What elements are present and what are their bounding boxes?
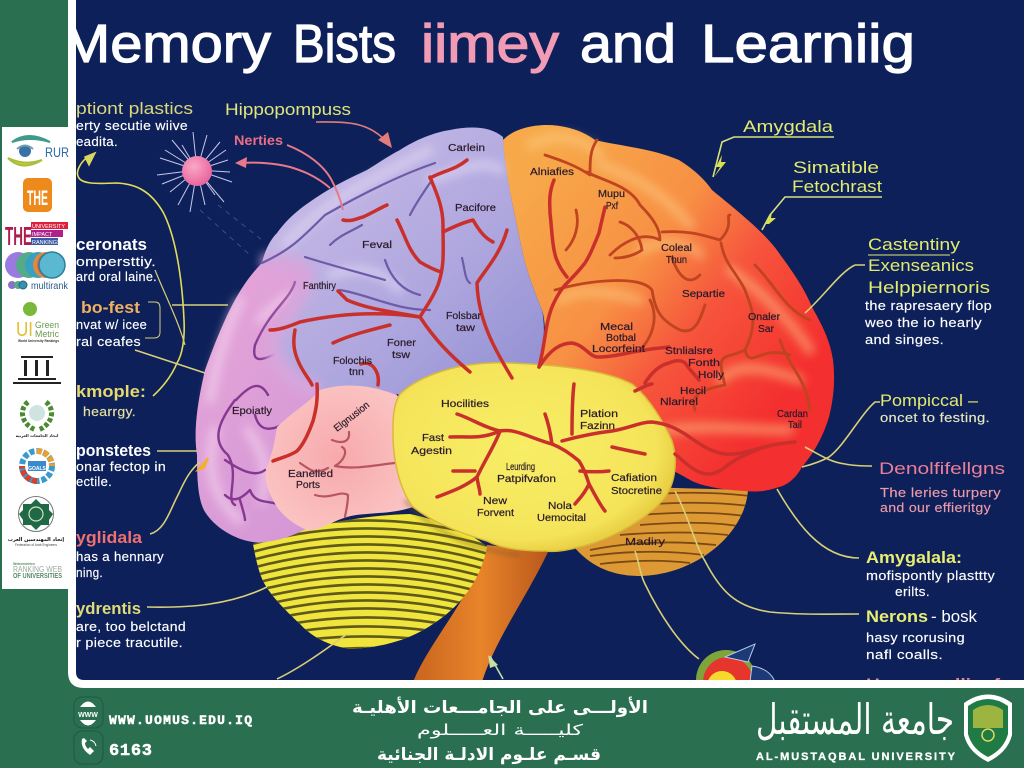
right callouts: Pompiccal – [880,391,979,410]
right callouts [743,117,1005,694]
logo: RUR: RUR [45,144,69,160]
arrow: hippocampus [316,122,390,146]
footer: Arabic institution text: كليـــــة العـــــلوم [417,721,584,739]
left callouts: hearrgy. [83,404,136,419]
right callouts: the rapresaery flop [865,298,992,313]
brain stem [413,545,548,682]
right callouts: Fetochrast [792,177,882,196]
brain region labels: Alniafies [530,167,574,178]
orange callout dot left [198,458,208,470]
logo: Federation of Arab Engineers [8,496,64,547]
logo: Federation of Arab Engineers: Federation of Arab Engineers [15,543,57,547]
left callouts: ponstetes [76,441,151,460]
logo: Federation of Arab Engineers: إتحاد المهندسين العرب [8,537,64,543]
footer: Arabic institution text [352,697,648,765]
logo: multirank [5,252,69,292]
brain region labels: Cafiation [611,473,657,484]
footer: university logo [756,694,1012,763]
brain region labels: Locorfeint [592,344,645,355]
brain region labels: Pxf [606,201,618,212]
brain region labels: Holly [698,370,724,381]
logo: UI GreenMetric: Green [35,320,59,330]
logo: Ranking Web of Universities: OF UNIVERSITIES [13,571,62,580]
icon: www globe: WWW [78,712,98,719]
brain region labels: Thun [666,255,687,266]
website address: WWW.UOMUS.EDU.IQ [109,713,252,728]
title: iimey [421,14,559,74]
neuron illustration [157,132,262,255]
brain region labels: Plation [580,409,618,420]
brain region labels: Stnlialsre [665,346,713,357]
right callouts: weo the io hearly [864,315,982,330]
icon: university shield [964,694,1012,762]
logo: UI GreenMetric [16,302,60,343]
logo: Arab universities wreath [16,402,59,438]
arrowhead: nerties [235,157,247,168]
left cerebellum and stem edge shadow [405,500,520,555]
label: nerties: Nerties [234,132,283,148]
left callouts: erty secutie wiive [76,118,188,133]
lightning mark: amygdala [714,155,726,177]
icon: www globe [74,697,103,728]
logo: SDG ring: GOALS [28,466,47,472]
upper lobe folds [262,163,470,310]
brain region labels: Mecal [600,322,633,333]
brain region labels: tnn [349,367,364,378]
brain region labels: Epoiatly [232,406,272,417]
left callouts: ectile. [76,474,112,489]
logo: UI GreenMetric: Metric [35,329,59,339]
logo: SDG ring [22,451,52,481]
logo: UI GreenMetric: UI [16,319,33,341]
brain region labels: Eanelied [288,469,333,480]
logo: Ranking Web of Universities: Webometrics [13,562,35,566]
brain region labels: Tail [788,420,802,431]
right callouts: Simatible [793,158,879,177]
logo: Ranking Web of Universities: RANKING WEB [13,565,62,574]
brain region labels: Folsbar [446,311,482,322]
brain region labels: Fanthiry [303,281,336,292]
brain region labels: Uemocital [537,513,586,524]
brain region labels: Forvent [477,508,514,519]
brain region labels: Sar [758,324,775,335]
left callouts: ning. [76,565,103,580]
brain region labels: Fonth [688,358,720,369]
brain region labels: Hecil [680,386,706,397]
left callouts: are, too belctand [76,619,186,634]
brain region labels: Folochis [333,356,372,367]
left callouts: has a hennary [76,549,164,564]
right callouts: Castentiny [868,235,961,254]
lower lobe folds [217,280,296,522]
brain region labels: Foner [387,338,417,349]
left callouts: ceronats [76,235,147,254]
left callouts: eadita. [76,134,118,149]
right callouts: oncet to festing. [880,410,990,425]
left callouts: bo-fest [81,298,140,317]
cerebellum right, orange [575,487,750,576]
brain region labels: New [483,496,508,507]
left callouts: yglidala [76,528,143,547]
top label: hippopompuss: Hippopompuss [225,100,351,119]
right callouts: Denolfifellgns [879,459,1005,478]
lobe folds [545,140,810,410]
right callouts: Amygdala [743,117,834,136]
brain region labels: Separtie [682,289,726,300]
left callouts [76,99,193,650]
brain region labels: tsw [392,350,411,361]
logo: THE impact rankings: RANKINGS [32,240,61,246]
lightning mark: simatible [765,212,776,224]
right callouts: Helppiernoris [868,278,990,297]
right callouts: - bosk [931,607,977,626]
brain region labels: Patpifvafon [497,474,556,485]
logo: columns [13,356,61,384]
right callouts: Nerons [866,607,928,626]
brain region labels: Nola [548,501,572,512]
arrowhead: yellow curve [85,153,95,165]
brain region labels: Pacifore [455,203,496,214]
right callouts: Exenseanics [868,256,974,275]
title [76,22,912,74]
right callouts: Hoooomallinsf [866,675,1000,694]
brain region labels: Coleal [661,243,692,254]
brain region labels [232,143,808,548]
arrow: lobe to neuron [240,163,330,188]
brain region labels: Nlarirel [660,397,698,408]
logo: RUR [8,136,69,166]
brain region labels: Carlein [448,143,485,154]
right callouts: erilts. [895,584,930,599]
white ranking sidebar [2,127,75,589]
upper lobe: lilac [262,128,544,400]
cerebellum left, striped [253,514,487,649]
title: Bists [293,14,396,74]
lower back lobe: pink-purple [196,259,400,543]
right callouts: hasy rcorusing [866,630,965,645]
brain region labels: Fazinn [580,421,615,432]
logo: THE orange [23,178,52,212]
lower pink lobe [265,386,413,530]
brain region labels: Madiry [625,537,665,548]
right callouts: Amygalala: [866,548,962,567]
logo: THE impact rankings: THE [5,221,32,251]
brain region labels: Agestin [411,446,452,457]
brain region labels: Ports [296,480,320,491]
phone number: 6163 [109,742,152,761]
title: Memory [62,14,271,74]
brain region labels: Hocilities [441,399,489,410]
red blood vessels [270,160,795,511]
brain region labels: taw [456,323,476,334]
right lobe: orange to red [503,125,834,492]
left callouts: r piece tracutile. [76,635,183,650]
logo: UI GreenMetric: World University Rankings [18,338,60,343]
brain region labels: Fast [422,433,444,444]
icon: phone [74,731,103,764]
footer: Arabic institution text: قسـم علـوم الادلـة الجنائية [377,745,601,765]
right callouts: and our effieritgy [880,500,991,515]
right callouts: nafl coalls. [866,647,943,662]
pink lobe folds [300,432,395,517]
central yellow lobe [393,363,675,551]
brain region labels: Cardan [777,409,808,420]
brain region labels: Onaler [748,312,781,323]
logo: Ranking Web of Universities [13,562,62,580]
brain region labels: Leurding [506,462,535,473]
right callouts: The leries turpery [880,485,1001,500]
callout leader lines and arrows [77,122,882,679]
brain region labels: Botbal [606,333,636,344]
footer: university logo: AL-MUSTAQBAL UNIVERSITY [756,751,956,763]
logo: Arab universities wreath: اتحاد الجامعات العربية [16,433,59,438]
left callouts: ydrentis [76,599,141,618]
footer: website and phone [74,697,252,764]
logo: THE orange: THE [27,187,48,210]
brain region labels: Elgnusion [332,400,372,434]
right callouts: and singes. [865,332,944,347]
brain region labels: Feval [362,240,392,251]
footer: Arabic institution text: الأولـــى على الجامـــعات الأهليـة [352,697,648,718]
title: and [580,14,676,74]
arrowhead: stem [488,655,498,668]
arrowhead: hippocampus [378,132,392,148]
left callouts: nvat w/ icee [76,317,147,332]
left callouts: ral ceafes [76,334,141,349]
brain region labels: Stocretine [611,486,662,497]
left callouts: ptiont plastics [76,99,193,118]
logo: THE impact rankings: IMPACT [32,232,53,238]
left callouts: onar fectop in [76,459,166,474]
left callouts: ompersttiy. [76,254,156,269]
logo: THE impact rankings: UNIVERSITY [32,224,65,230]
left callouts: ard oral laine. [76,269,157,284]
brain region labels: Mupu [598,189,625,200]
arrow: nerties to lobe [287,145,343,210]
logo: multirank: multirank [31,281,69,292]
left callouts: kmople: [76,382,146,401]
small brain icon at bottom [696,643,775,680]
right callouts: mofispontly plasttty [866,568,995,583]
title: Learniig [701,14,915,74]
